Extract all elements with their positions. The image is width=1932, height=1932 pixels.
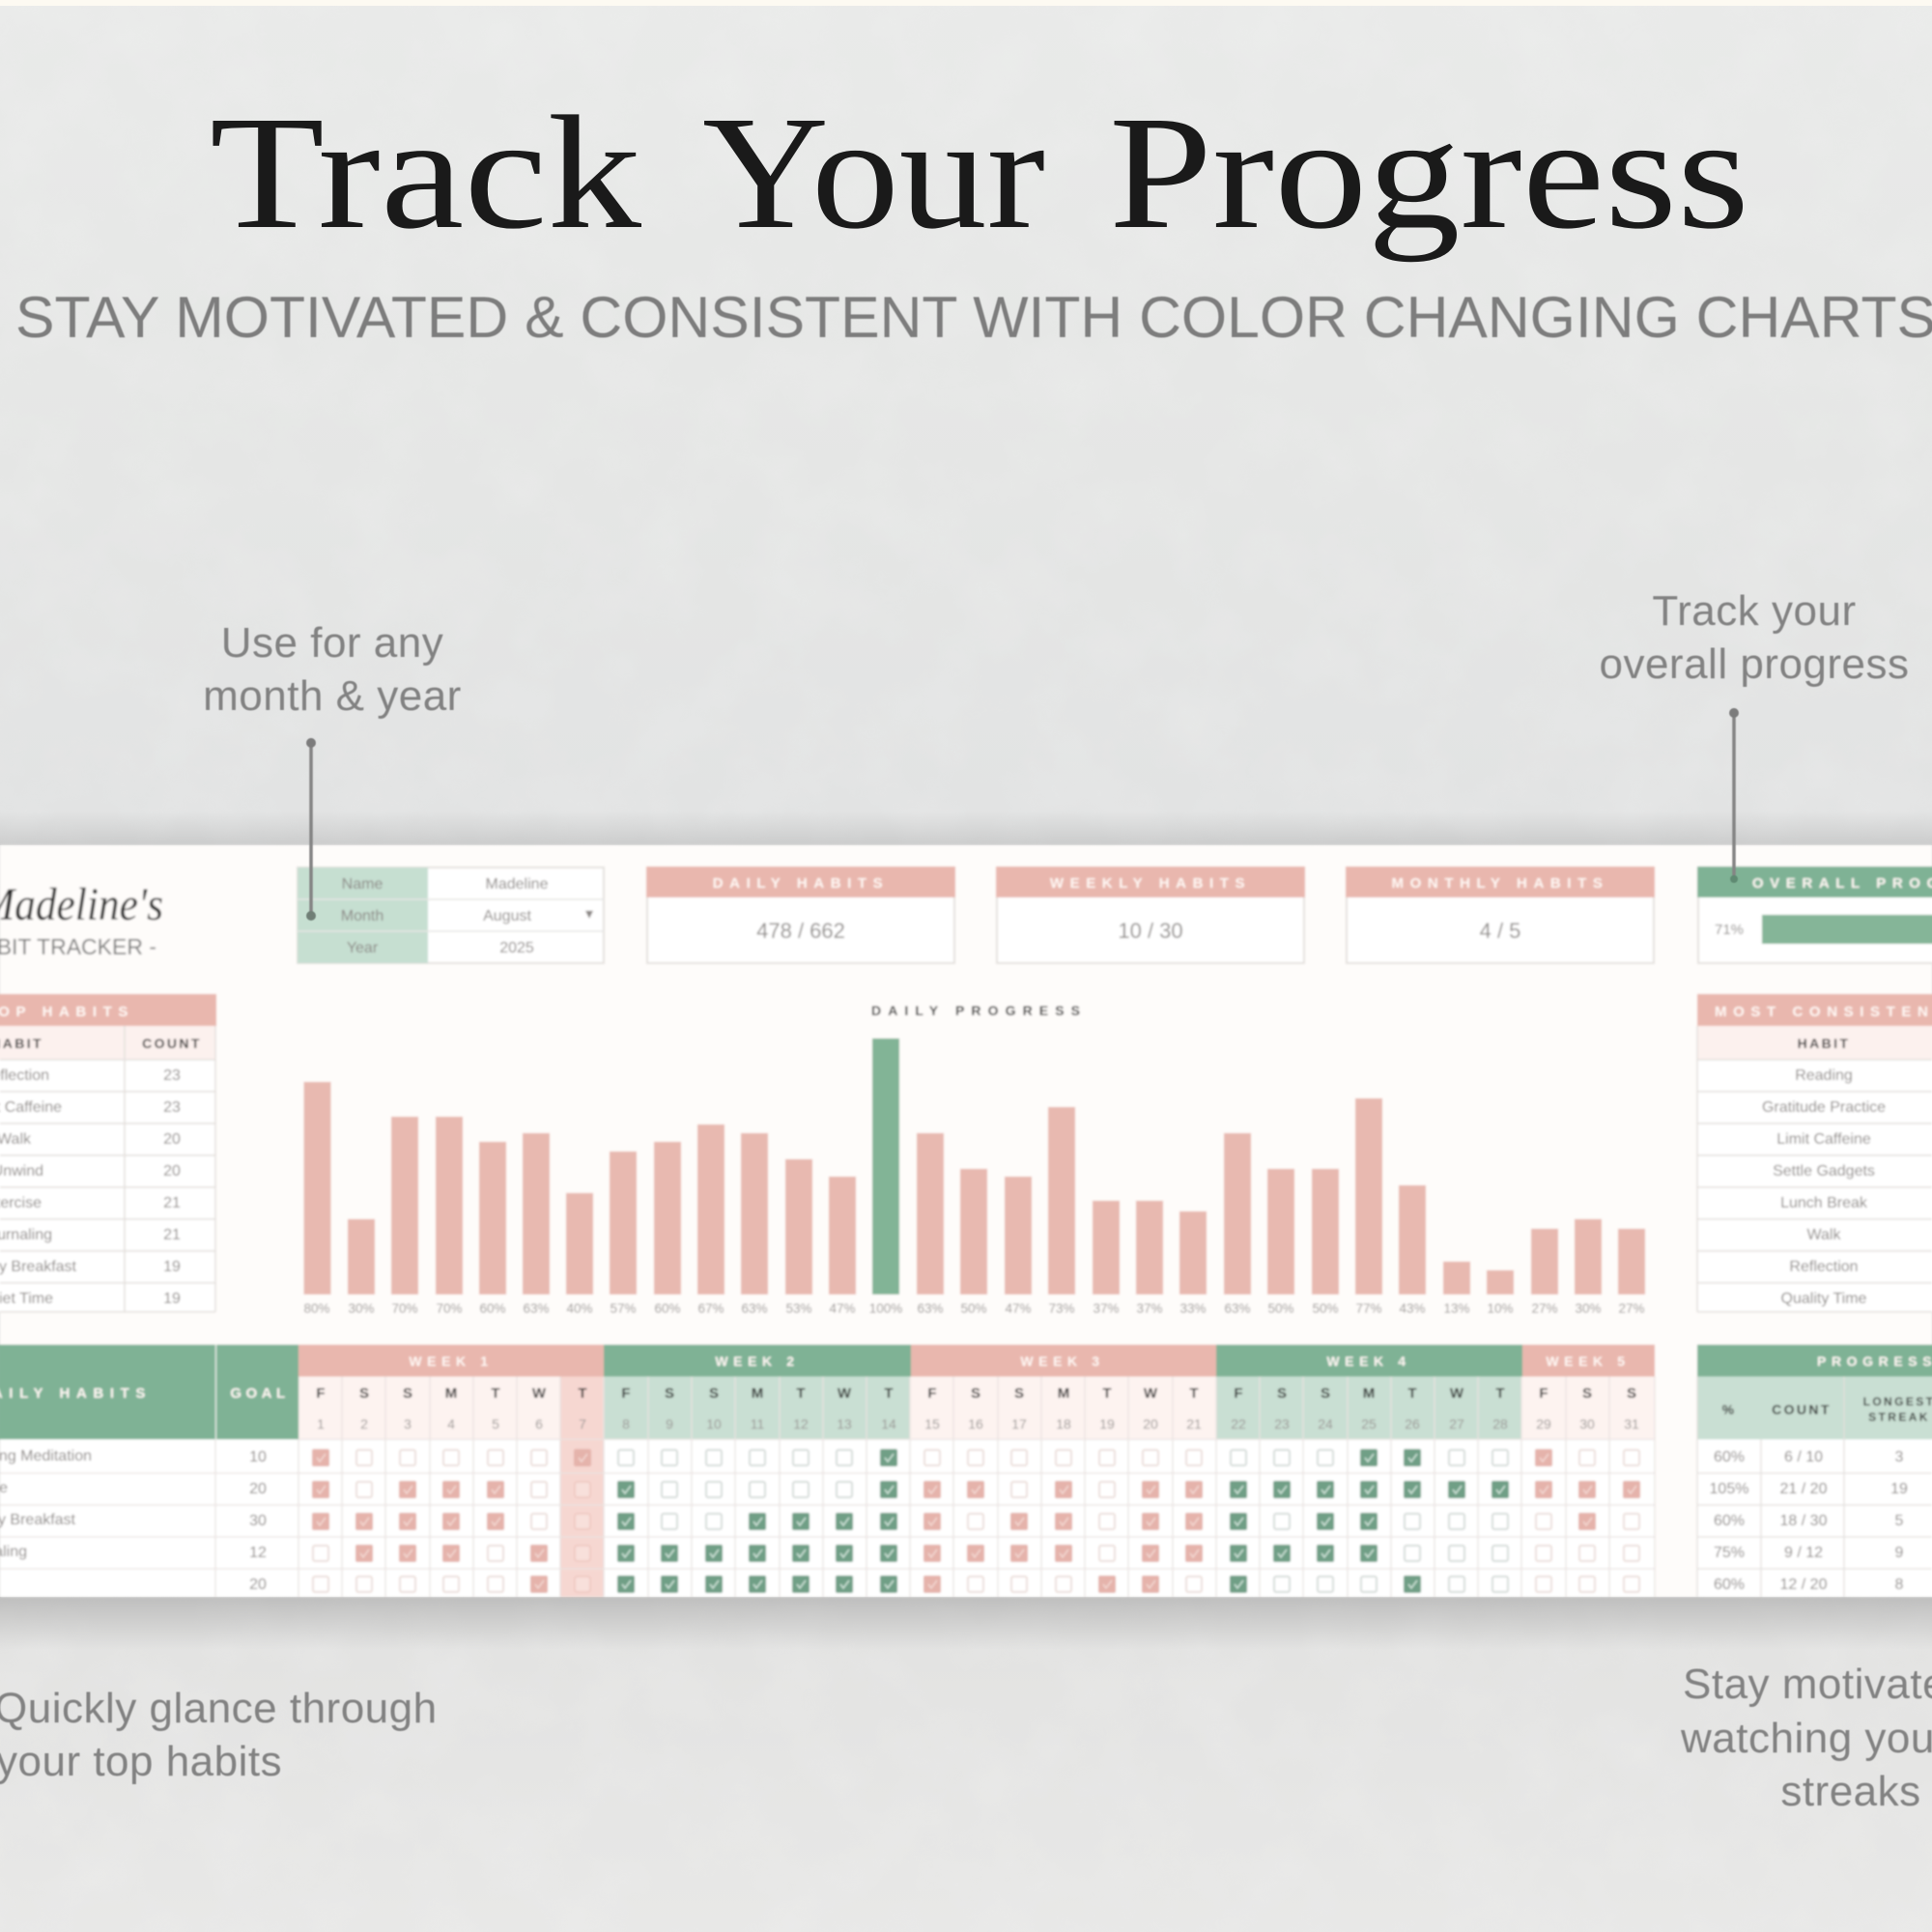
bar value labels: 63% — [917, 1301, 944, 1316]
habit names and goals: 10 — [249, 1449, 267, 1465]
table: progress: 21 / 20 — [1780, 1481, 1828, 1497]
checkboxes row 5 — [313, 1576, 1639, 1593]
header: week 2: WEEK 2 — [715, 1353, 800, 1369]
table: progress: 60% — [1714, 1449, 1745, 1465]
card: monthly habits — [1346, 867, 1655, 963]
callout: overall progress — [1599, 587, 1910, 688]
bar value labels: 10% — [1487, 1301, 1514, 1316]
card: weekly habits — [996, 867, 1305, 963]
bar value labels: 70% — [391, 1301, 418, 1316]
date numbers: 6 — [535, 1416, 543, 1432]
bar value labels: 100% — [869, 1301, 902, 1316]
table: most consistent habits: Limit Caffeine — [1776, 1131, 1871, 1148]
date numbers: 15 — [924, 1416, 940, 1432]
date numbers: 2 — [360, 1416, 368, 1432]
bar value labels: 70% — [436, 1301, 463, 1316]
panel: name month year: Name — [342, 876, 383, 893]
table: top habits: 21 — [163, 1195, 181, 1211]
table: most consistent habits: Quality Time — [1781, 1291, 1867, 1307]
bar value labels: 63% — [523, 1301, 550, 1316]
bars — [303, 1038, 1645, 1294]
title: Track — [210, 83, 641, 263]
date numbers: 14 — [881, 1416, 896, 1432]
table: progress: COUNT — [1772, 1402, 1832, 1417]
table: progress: % — [1722, 1402, 1736, 1417]
week 4 day header — [1216, 1377, 1521, 1439]
day header pink background — [298, 1377, 1655, 1439]
date numbers: 26 — [1405, 1416, 1420, 1432]
header: week 3: WEEK 3 — [1020, 1353, 1105, 1369]
card: monthly habits: 4 / 5 — [1480, 919, 1520, 943]
table: progress: 18 / 30 — [1780, 1513, 1828, 1529]
callout: streaks — [1680, 1661, 1932, 1815]
table: progress: 60% — [1714, 1577, 1745, 1593]
header: goal — [216, 1345, 298, 1439]
date numbers: 3 — [404, 1416, 412, 1432]
table: top habits: 19 — [163, 1259, 181, 1275]
bar value labels: 50% — [1267, 1301, 1294, 1316]
habit names and goals: 20 — [249, 1577, 267, 1593]
arrow: overall progress pointer — [1729, 708, 1739, 883]
panel: habit tracker dashboard — [0, 845, 1932, 1597]
date numbers: 10 — [706, 1416, 722, 1432]
date numbers: 18 — [1056, 1416, 1071, 1432]
table: most consistent habits: HABIT — [1798, 1036, 1850, 1051]
bar value labels: 63% — [741, 1301, 768, 1316]
table: most consistent habits — [1697, 994, 1932, 1312]
table: progress: 5 — [1895, 1513, 1904, 1529]
table: progress: 60% — [1714, 1513, 1745, 1529]
card: daily habits: 478 / 662 — [756, 919, 845, 943]
table: most consistent habits: Settle Gadgets — [1773, 1163, 1875, 1179]
bar value labels: 47% — [1005, 1301, 1032, 1316]
table: progress: 12 / 20 — [1780, 1577, 1828, 1593]
date numbers: 13 — [837, 1416, 852, 1432]
date numbers: 1 — [317, 1416, 325, 1432]
card: monthly habits: MONTHLY HABITS — [1392, 875, 1608, 892]
date numbers: 8 — [622, 1416, 630, 1432]
habit names and goals: 30 — [249, 1513, 267, 1529]
table: top habits: 23 — [163, 1067, 181, 1084]
bar value labels — [303, 1301, 1645, 1316]
table: most consistent habits: Lunch Break — [1780, 1195, 1868, 1211]
callout: top habits — [0, 1685, 438, 1785]
date numbers: 27 — [1449, 1416, 1464, 1432]
bar value labels: 33% — [1179, 1301, 1207, 1316]
date numbers: 21 — [1186, 1416, 1202, 1432]
bar value labels: 80% — [303, 1301, 330, 1316]
bar chart: daily progress — [303, 1003, 1645, 1316]
date numbers: 28 — [1492, 1416, 1508, 1432]
bar value labels: 63% — [1224, 1301, 1251, 1316]
header: week 2 — [604, 1345, 911, 1377]
title: Your — [702, 83, 1045, 263]
card: daily habits: DAILY HABITS — [713, 875, 889, 892]
header: goal: GOAL — [230, 1385, 290, 1402]
table: daily habits tracker — [0, 1345, 1655, 1597]
callout: streaks: streaks — [1780, 1768, 1921, 1815]
header: week 1 — [298, 1345, 604, 1377]
checkboxes row 4 — [313, 1545, 1639, 1562]
week 2 day header — [604, 1377, 910, 1439]
grid lines — [0, 1377, 1655, 1597]
table: progress: 6 / 10 — [1784, 1449, 1823, 1465]
table: top habits: 21 — [163, 1227, 181, 1243]
panel: name month year: Month — [341, 908, 384, 924]
date numbers: 16 — [968, 1416, 983, 1432]
panel: name month year: Year — [347, 940, 379, 956]
bar value labels: 77% — [1355, 1301, 1382, 1316]
table: progress: 9 — [1895, 1545, 1904, 1561]
habit names and goals: 12 — [249, 1545, 267, 1561]
callout: top habits: Quickly glance through — [0, 1685, 438, 1732]
arrow: month and year pointer — [306, 738, 316, 921]
header: week 3 — [911, 1345, 1216, 1377]
habit names and goals — [0, 1448, 267, 1593]
header: week 1: WEEK 1 — [409, 1353, 494, 1369]
callout: month and year — [203, 619, 462, 720]
callout: overall progress: Track your — [1652, 587, 1857, 635]
subtitle: STAY MOTIVATED & CONSISTENT WITH COLOR CHANGING CHARTS — [15, 285, 1932, 350]
bar value labels: 37% — [1093, 1301, 1120, 1316]
bar value labels: 30% — [348, 1301, 375, 1316]
date numbers: 25 — [1361, 1416, 1377, 1432]
panel: name month year: Madeline — [486, 876, 549, 893]
card: overall progress: 71% — [1715, 922, 1744, 938]
table: top habits: 23 — [163, 1099, 181, 1116]
panel: name month year: 2025 — [499, 940, 534, 956]
date numbers: 17 — [1011, 1416, 1027, 1432]
header: week 4 — [1216, 1345, 1522, 1377]
table: most consistent habits: Reading — [1795, 1067, 1853, 1084]
checkboxes row 2 — [312, 1481, 1640, 1498]
date numbers: 30 — [1579, 1416, 1595, 1432]
checkboxes row 1 — [312, 1449, 1639, 1466]
table: top habits: 19 — [163, 1291, 181, 1307]
table: progress: 3 — [1895, 1449, 1904, 1465]
table: most consistent habits: Walk — [1807, 1227, 1841, 1243]
weekday letters: FSSMTWTFSSMTWTFSSMTWTFSSMTWTFSS — [316, 1385, 1636, 1402]
table: top habits: 20 — [163, 1131, 181, 1148]
table: most consistent habits: Gratitude Practice — [1762, 1099, 1886, 1116]
panel: name month year — [298, 867, 604, 963]
panel: name month year: ▾ — [585, 906, 593, 923]
date numbers — [317, 1416, 1639, 1432]
date numbers: 19 — [1099, 1416, 1115, 1432]
bar value labels: 50% — [960, 1301, 987, 1316]
table: progress: 8 — [1895, 1577, 1904, 1593]
table: progress — [1697, 1345, 1932, 1597]
date numbers: 20 — [1143, 1416, 1158, 1432]
date numbers: 23 — [1274, 1416, 1290, 1432]
callout: month and year: month & year — [203, 672, 462, 720]
date numbers: 7 — [579, 1416, 586, 1432]
table: top habits — [0, 994, 216, 1312]
habit names and goals: 20 — [249, 1481, 267, 1497]
bar value labels: 27% — [1531, 1301, 1558, 1316]
title — [210, 83, 1749, 263]
bar value labels: 67% — [697, 1301, 724, 1316]
table: top habits: 20 — [163, 1163, 181, 1179]
row background — [0, 1439, 1655, 1597]
bar value labels: 40% — [566, 1301, 593, 1316]
tracker logo — [0, 879, 163, 959]
bar value labels: 53% — [785, 1301, 812, 1316]
date numbers: 5 — [492, 1416, 499, 1432]
date numbers: 31 — [1624, 1416, 1639, 1432]
title: Progress — [1109, 83, 1749, 263]
header: daily habits — [0, 1345, 215, 1439]
panel: name month year: August — [483, 908, 531, 924]
bar value labels: 60% — [654, 1301, 681, 1316]
callout: overall progress: overall progress — [1599, 640, 1910, 688]
header: week 4: WEEK 4 — [1326, 1353, 1411, 1369]
card: overall progress — [1697, 867, 1932, 963]
date numbers: 11 — [751, 1416, 764, 1432]
header: week 5 — [1522, 1345, 1655, 1377]
callout: top habits: your top habits — [0, 1738, 282, 1785]
date numbers: 4 — [447, 1416, 455, 1432]
table: progress: 9 / 12 — [1784, 1545, 1823, 1561]
panel shadow below — [0, 1597, 1932, 1650]
table: progress: STREAK — [1868, 1410, 1930, 1424]
highlighted day column — [560, 1377, 604, 1597]
card: weekly habits: WEEKLY HABITS — [1050, 875, 1251, 892]
table: top habits: COUNT — [142, 1036, 202, 1051]
table: most consistent habits: Reflection — [1789, 1259, 1859, 1275]
date numbers: 22 — [1231, 1416, 1246, 1432]
table: progress: 105% — [1710, 1481, 1748, 1497]
checkboxes row 3 — [312, 1513, 1639, 1530]
date numbers: 12 — [793, 1416, 809, 1432]
bar value labels: 57% — [610, 1301, 637, 1316]
bar value labels: 27% — [1618, 1301, 1645, 1316]
bar value labels: 43% — [1399, 1301, 1426, 1316]
chart title: DAILY PROGRESS — [871, 1003, 1080, 1018]
date numbers: 24 — [1318, 1416, 1333, 1432]
bar value labels: 47% — [829, 1301, 856, 1316]
top cream strip — [0, 0, 1932, 6]
panel shadow above — [0, 811, 1932, 845]
bar value labels: 73% — [1048, 1301, 1075, 1316]
table: progress: 75% — [1714, 1545, 1745, 1561]
date numbers: 9 — [666, 1416, 673, 1432]
table: progress: 19 — [1890, 1481, 1908, 1497]
callout: month and year: Use for any — [221, 619, 443, 667]
header: week 5: WEEK 5 — [1546, 1353, 1631, 1369]
bar value labels: 13% — [1443, 1301, 1470, 1316]
bar value labels: 50% — [1312, 1301, 1339, 1316]
bar value labels: 37% — [1136, 1301, 1163, 1316]
bar value labels: 30% — [1575, 1301, 1602, 1316]
date numbers: 29 — [1536, 1416, 1551, 1432]
card: daily habits — [646, 867, 955, 963]
bar value labels: 60% — [479, 1301, 506, 1316]
card: weekly habits: 10 / 30 — [1118, 919, 1183, 943]
